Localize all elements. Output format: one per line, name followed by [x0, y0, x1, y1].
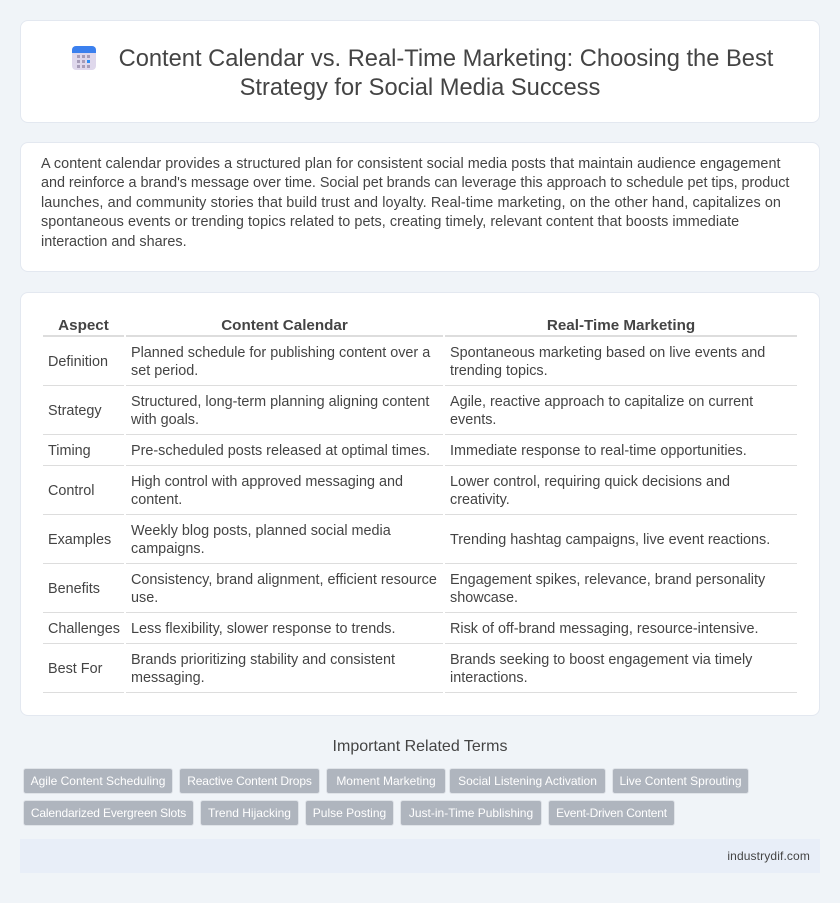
comparison table: interactions.	[450, 670, 528, 686]
tag	[200, 800, 299, 826]
comparison table: Challenges	[48, 621, 120, 637]
tag: Just-in-Time Publishing	[409, 806, 533, 820]
tag: Trend Hijacking	[208, 806, 291, 820]
text block: introduction: spontaneous events or trending topics related to pets, creating timely, relevant content that boosts immediate	[41, 214, 739, 230]
comparison table: content.	[131, 492, 182, 508]
comparison table: Control	[48, 483, 94, 499]
comparison table: Benefits	[48, 581, 100, 597]
comparison table: Agile, reactive approach to capitalize on current	[450, 394, 753, 410]
comparison table: Engagement spikes, relevance, brand personality	[450, 572, 765, 588]
tag: Reactive Content Drops	[187, 774, 312, 788]
comparison table: Examples	[48, 532, 111, 548]
comparison table: showcase.	[450, 590, 518, 606]
comparison table: creativity.	[450, 492, 510, 508]
tag: Calendarized Evergreen Slots	[31, 806, 186, 820]
comparison table: Weekly blog posts, planned social media	[131, 523, 391, 539]
comparison table: Content Calendar	[221, 317, 348, 334]
comparison table: High control with approved messaging and	[131, 474, 403, 490]
comparison table: campaigns.	[131, 541, 205, 557]
comparison table: Strategy	[48, 403, 102, 419]
comparison table: Risk of off-brand messaging, resource-intensive.	[450, 621, 758, 637]
title	[119, 46, 774, 101]
title: Strategy for Social Media Success	[240, 75, 600, 101]
tag	[612, 768, 749, 794]
comparison table: Best For	[48, 661, 102, 677]
comparison table	[43, 317, 797, 693]
comparison table: Pre-scheduled posts released at optimal times.	[131, 443, 430, 459]
comparison table: Real-Time Marketing	[547, 317, 695, 334]
text block: introduction: and reinforce a brand's message over time. Social pet brands can leverage this approach to schedule pet tips, product	[41, 175, 789, 191]
comparison table: trending topics.	[450, 363, 548, 379]
tag	[326, 768, 446, 794]
comparison table: Trending hashtag campaigns, live event reactions.	[450, 532, 770, 548]
tag	[305, 800, 394, 826]
panel: comparison table	[20, 292, 820, 716]
comparison table: Brands seeking to boost engagement via timely	[450, 652, 752, 668]
comparison table: Consistency, brand alignment, efficient resource	[131, 572, 437, 588]
comparison table: Spontaneous marketing based on live events and	[450, 345, 765, 361]
tag: Moment Marketing	[336, 774, 436, 788]
tag	[400, 800, 542, 826]
tag: Social Listening Activation	[458, 774, 597, 788]
comparison table: Aspect	[58, 317, 109, 334]
tag: Pulse Posting	[313, 806, 386, 820]
icon: calendar	[72, 46, 96, 70]
tag	[179, 768, 320, 794]
tag	[23, 768, 173, 794]
comparison table: set period.	[131, 363, 198, 379]
comparison table: Brands prioritizing stability and consistent	[131, 652, 395, 668]
comparison table: Immediate response to real-time opportunities.	[450, 443, 747, 459]
heading: related terms: Important Related Terms	[333, 738, 507, 755]
comparison table: Planned schedule for publishing content over a	[131, 345, 430, 361]
tag: Event-Driven Content	[556, 806, 667, 820]
title: Content Calendar vs. Real-Time Marketing: Choosing the Best	[119, 46, 773, 72]
footer	[20, 839, 820, 873]
tag: Live Content Sprouting	[619, 774, 742, 788]
tag list	[23, 768, 749, 826]
comparison table: Structured, long-term planning aligning content	[131, 394, 429, 410]
panel: header	[20, 20, 820, 123]
comparison table: Definition	[48, 354, 108, 370]
text block: introduction	[41, 156, 790, 250]
comparison table: use.	[131, 590, 158, 606]
comparison table: events.	[450, 412, 496, 428]
comparison table: with goals.	[131, 412, 199, 428]
comparison table: messaging.	[131, 670, 205, 686]
text block: introduction: A content calendar provides a structured plan for consistent social media posts that maintain audience engagement	[41, 156, 781, 172]
tag: Agile Content Scheduling	[31, 774, 165, 788]
comparison table: Timing	[48, 443, 91, 459]
tag	[548, 800, 675, 826]
tag	[23, 800, 194, 826]
text block: introduction: interaction and shares.	[41, 234, 187, 250]
footer: industrydif.com	[727, 849, 810, 863]
tag	[449, 768, 606, 794]
text block: introduction: launches, and community stories that build trust and loyalty. Real-time marketing, on the other hand, capitalizes on	[41, 195, 781, 211]
comparison table: Less flexibility, slower response to trends.	[131, 621, 395, 637]
comparison table: Lower control, requiring quick decisions and	[450, 474, 730, 490]
panel: introduction	[20, 142, 820, 272]
